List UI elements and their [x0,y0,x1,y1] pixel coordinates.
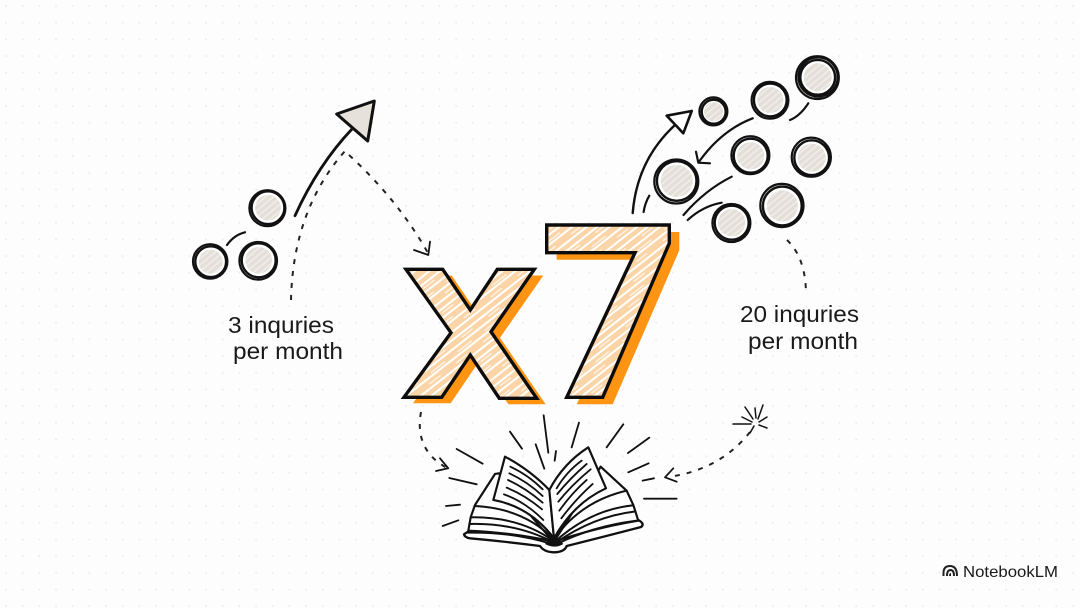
hatched 7 [547,225,669,397]
dashed arrow from x7 to book [420,412,448,471]
dashed arrow from label up and down to x7 [291,151,430,300]
left coin group: three coins [193,190,285,280]
orange shadow of x [413,276,546,404]
label: per month left: per month [233,338,343,364]
icon: notebook arcs [944,566,957,576]
rays [443,415,677,526]
page text lines [504,461,593,520]
cover [464,520,643,552]
arrow from coins curving down-left [696,118,753,163]
right coin motion strokes [644,103,808,220]
front page left [493,457,554,538]
front page right [549,447,606,538]
back pages left [468,473,554,542]
back pages right [554,467,638,542]
label: 3 inquiries: 3 inquries [228,312,334,338]
wordmark: NotebookLM [963,564,1058,581]
spark burst [733,405,767,433]
big x7 multiplier [404,225,679,404]
dashed link under coins to right label [787,240,806,295]
orange shadow of 7 [557,232,679,404]
label: per month right: per month [748,328,858,354]
right solid arrow to triangle [633,111,692,213]
label: 20 inquiries: 20 inquries [740,301,859,327]
NotebookLM logo [944,564,1058,581]
left solid growth arrow [295,101,374,216]
hatched x [404,269,537,398]
page edges [467,491,637,544]
open book illustration [443,415,677,552]
spine [545,538,563,547]
dashed arrow from spark to book [665,432,750,482]
right coin group: eight coins [654,56,839,242]
